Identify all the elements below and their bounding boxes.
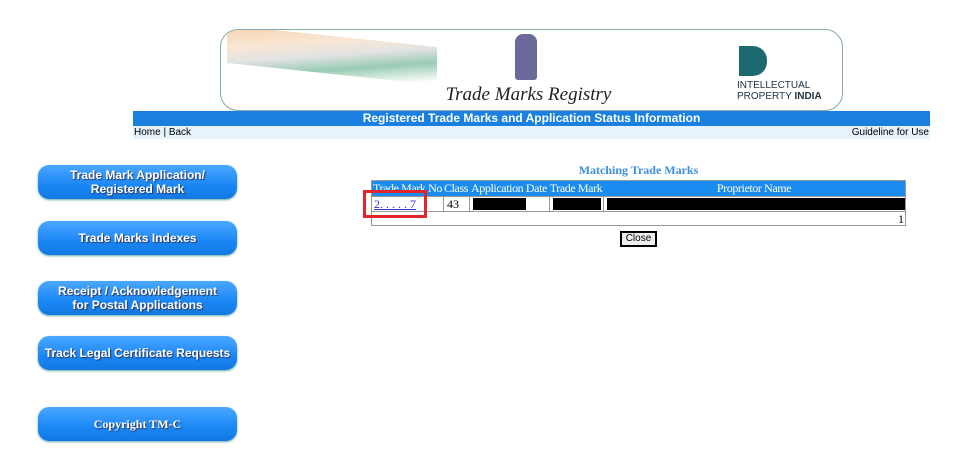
results table [371,180,906,226]
header row: Trade Mark No [373,181,442,195]
button: indexes [38,221,237,255]
button: application: Registered Mark [91,182,184,196]
header row: Proprietor Name [717,181,791,195]
button: application: Trade Mark Application/ [70,168,205,182]
button: indexes: Trade Marks Indexes [78,231,197,245]
banner title: Trade Marks Registry [446,84,611,105]
button: copyright: Copyright TM-C [94,417,181,431]
footer count: 1 [898,212,904,226]
button: receipt: for Postal Applications [72,298,203,312]
header row: Class [444,181,468,195]
button: receipt: Receipt / Acknowledgement [58,284,217,298]
IP India logo: PROPERTY INDIA [737,91,822,102]
nav bar [133,126,930,139]
IP India logo [737,46,822,102]
button: track legal [38,336,237,370]
table heading: Matching Trade Marks [579,163,698,177]
emblem [515,34,537,80]
button: track legal: Track Legal Certificate Requests [45,346,230,360]
IP India logo: INTELLECTUAL [737,80,810,91]
data row: 2. . . . . 7 [374,197,416,211]
nav bar: Home | Back [134,127,191,138]
header row [372,181,905,196]
banner [220,29,843,111]
title bar [133,111,930,126]
flag swoosh [227,25,437,85]
header row: Application Date [471,181,547,195]
data row: 43 [447,197,459,211]
button: receipt [38,281,237,315]
nav bar: Guideline for Use [852,127,929,138]
button: copyright [38,407,237,441]
close button: Close [626,233,651,244]
header row: Trade Mark [550,181,602,195]
data row [372,196,905,212]
title bar: Registered Trade Marks and Application Status Information [363,111,700,125]
close button [620,231,657,247]
highlight box [363,190,427,218]
button: application [38,165,237,199]
